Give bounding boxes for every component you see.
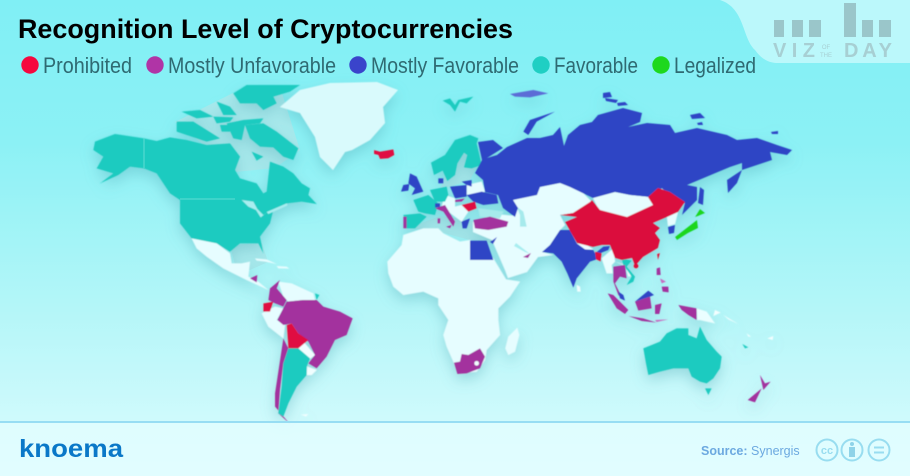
viz of the day logo: [773, 3, 893, 62]
romania: [462, 202, 477, 212]
java: [628, 316, 657, 323]
western balkans and central europe: [442, 195, 468, 222]
bolivia: [287, 323, 308, 348]
switzerland: [435, 203, 440, 207]
madagascar: [505, 328, 519, 355]
icon: no derivatives: [868, 440, 890, 460]
world map: [93, 82, 792, 424]
uruguay: [307, 367, 317, 375]
novaya zemlya: [523, 112, 555, 135]
north korea: [667, 212, 678, 226]
enclosed seas: [175, 87, 493, 270]
franz josef land: [510, 90, 548, 97]
french guiana: [315, 293, 319, 300]
sri lanka: [577, 285, 581, 292]
belarus: [467, 182, 485, 195]
egypt: [470, 241, 493, 260]
falkland islands: [301, 414, 308, 417]
new caledonia: [742, 344, 748, 348]
iceland: [374, 149, 394, 159]
svalbard: [443, 97, 473, 112]
papua new guinea: [697, 308, 715, 323]
baltics: [462, 180, 472, 187]
denmark: [438, 178, 443, 183]
ireland: [401, 184, 409, 192]
tasmania: [705, 388, 712, 395]
argentina: [278, 348, 310, 417]
france: [413, 195, 438, 215]
greenland: [280, 82, 398, 170]
mongolia: [593, 192, 655, 218]
middle east and central asia: [473, 183, 592, 278]
greece: [462, 218, 470, 228]
united states and canada: [93, 85, 317, 253]
north america: [93, 85, 317, 290]
icon: attribution: [842, 440, 862, 460]
mexico and central america: [192, 238, 268, 290]
new guinea papua: [678, 305, 697, 320]
spain: [403, 213, 427, 228]
scandinavia and finland: [431, 135, 482, 181]
lesotho: [474, 361, 479, 366]
sarawak: [635, 291, 654, 302]
legend: mostly favorable: Mostly Favorable: [371, 53, 519, 78]
legend: favorable: Favorable: [554, 53, 638, 78]
header panel: [720, 0, 910, 63]
taiwan: [657, 253, 660, 260]
paraguay: [298, 342, 315, 360]
russia: [475, 92, 792, 217]
persian gulf: [514, 243, 530, 254]
legend: legalized: Legalized: [674, 53, 756, 78]
african continent: [387, 228, 520, 373]
japan: [675, 209, 705, 240]
poland: [450, 185, 467, 198]
icon: cc: cc: [821, 445, 833, 457]
logo text of: OF: [822, 45, 830, 51]
laos and cambodia: [615, 262, 633, 277]
knoema logo: knoema: [19, 435, 124, 463]
asia: [542, 230, 773, 402]
melanesia islands: [713, 310, 721, 316]
bangladesh: [595, 252, 602, 262]
peninsular malaysia: [618, 292, 625, 301]
country borders: [144, 138, 235, 199]
uae: [523, 253, 531, 258]
caribbean islands: [255, 258, 277, 264]
footer: [0, 421, 910, 476]
legend: prohibited: Prohibited: [43, 53, 132, 78]
china: [560, 188, 685, 266]
legend: [21, 53, 756, 78]
ecuador: [263, 302, 273, 312]
sumatra: [608, 293, 628, 314]
australia: [643, 327, 722, 383]
south korea: [668, 225, 675, 234]
vietnam: [622, 258, 635, 285]
south america: [262, 280, 353, 424]
colombia: [268, 280, 287, 307]
pakistan and india: [542, 230, 610, 288]
caspian sea: [517, 207, 527, 227]
nepal strip: [577, 243, 593, 249]
logo text viz: VIZ: [773, 40, 815, 62]
germany and benelux: [430, 187, 448, 202]
eurasia colored countries: [374, 90, 555, 230]
turkey: [473, 217, 508, 230]
chile: [275, 338, 290, 424]
kamchatka: [727, 170, 742, 193]
new zealand: [760, 375, 771, 390]
britain: [408, 173, 423, 195]
logo text day: DAY: [844, 40, 893, 62]
sulawesi: [655, 303, 662, 314]
kalimantan: [635, 297, 652, 311]
sakhalin: [698, 187, 704, 205]
brazil: [277, 300, 353, 368]
peru: [262, 307, 285, 338]
israel: [490, 237, 497, 244]
ukraine: [467, 192, 498, 205]
black sea: [478, 208, 503, 218]
italy: [435, 205, 455, 227]
logo text the: THE: [820, 53, 832, 59]
portugal: [403, 217, 407, 228]
philippines: [657, 267, 661, 275]
thailand: [613, 265, 627, 300]
source: Source: Synergis: [701, 444, 800, 458]
south africa: [454, 348, 485, 374]
license icons: [816, 440, 890, 460]
venezuela and guyana: [278, 282, 315, 302]
title: Recognition Level of Cryptocurrencies: [18, 14, 513, 44]
africa: [387, 228, 520, 374]
legend: mostly unfavorable: Mostly Unfavorable: [168, 53, 336, 78]
slovakia and hungary: [455, 198, 465, 202]
great lakes: [242, 200, 287, 217]
hainan: [634, 264, 638, 268]
nicaragua: [250, 275, 257, 282]
myanmar: [602, 248, 615, 273]
siberian islands: [603, 92, 612, 98]
logo bars: [774, 3, 891, 37]
